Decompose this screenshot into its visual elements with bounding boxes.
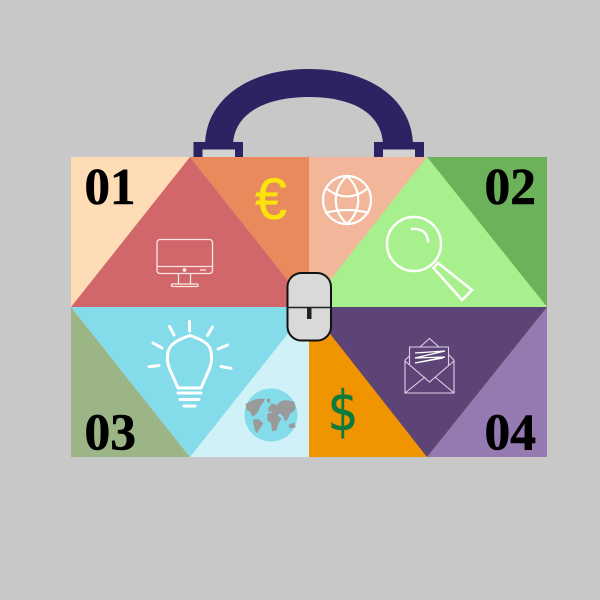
- icon: light bulb: [149, 322, 231, 406]
- briefcase handle: [194, 69, 424, 157]
- panel: 03 bottom-left section: [71, 307, 309, 457]
- icon: dollar sign: $: [328, 380, 358, 444]
- icon: monitor: [157, 240, 212, 286]
- number 01: 01: [84, 159, 136, 216]
- icon: wireframe globe: [323, 176, 371, 224]
- icon: open envelope: [405, 338, 454, 393]
- number 04: 04: [484, 404, 536, 462]
- number 02: 02: [484, 159, 536, 216]
- panel: 01 top-left section: [71, 157, 309, 307]
- icon: world map globe: [244, 388, 298, 442]
- briefcase lock: [288, 273, 331, 340]
- icon: magnifying glass: [387, 217, 472, 300]
- icon: euro sign: €: [255, 167, 287, 232]
- panel: 02 top-right section: [309, 157, 547, 307]
- number 03: 03: [84, 404, 136, 462]
- panel: 04 bottom-right section: [309, 307, 547, 457]
